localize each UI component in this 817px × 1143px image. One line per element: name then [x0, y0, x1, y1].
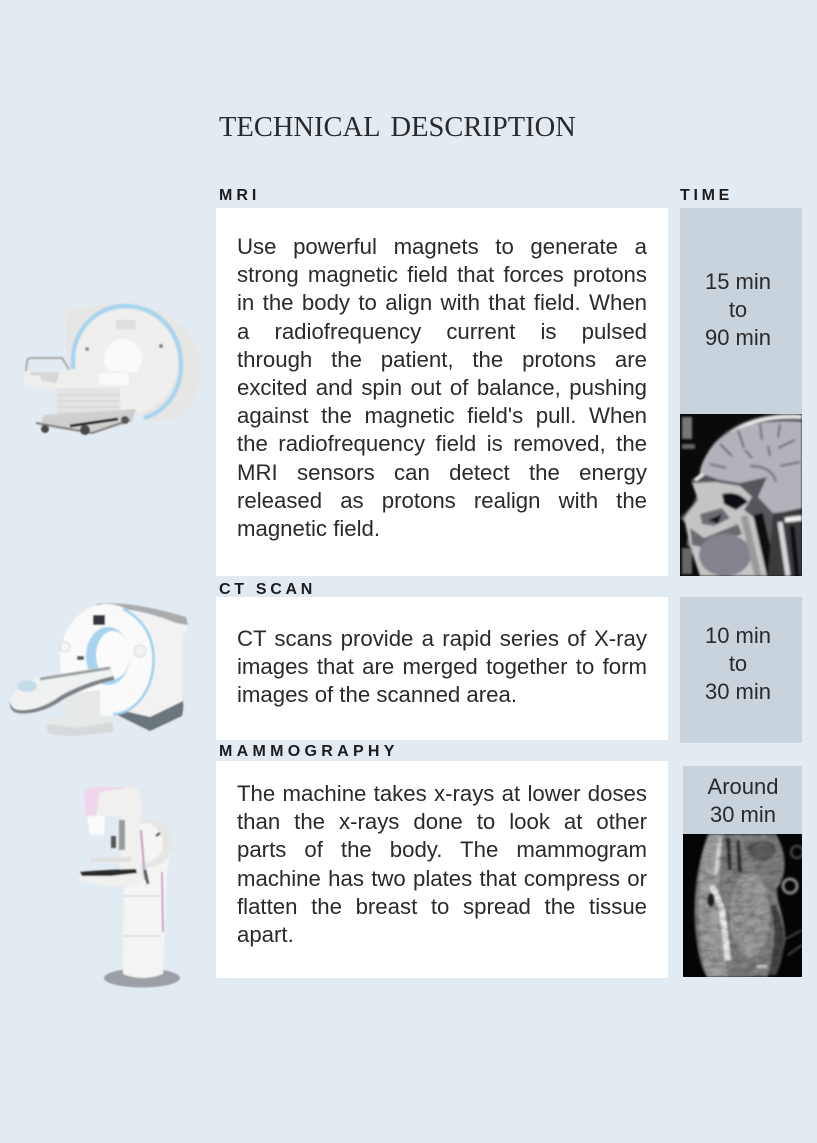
image: sagittal brain MRI	[680, 413, 802, 576]
illustrations layer	[9, 303, 802, 988]
text block: mammography description: machine has two plates that compress or	[237, 866, 647, 891]
text block: CT scan description: images of the scanned area.	[237, 682, 517, 707]
text block: MRI description: against the magnetic field's pull. When	[237, 403, 647, 428]
heading: time: TIME	[680, 187, 733, 204]
text block: MRI description: in the body to align with that field. When	[237, 290, 647, 315]
text: MRI time: 15 min	[705, 269, 771, 294]
text: CT scan time: 10 min	[705, 623, 771, 648]
title: TECHNICAL DESCRIPTION	[219, 112, 576, 143]
panel: mammography time	[683, 766, 802, 834]
panel: CT scan time	[680, 597, 802, 743]
text: MRI time	[705, 269, 771, 350]
panel: CT scan description	[216, 597, 668, 740]
text: MRI time: 90 min	[705, 325, 771, 350]
panel: MRI time	[680, 208, 802, 414]
text block: MRI description: a radiofrequency current is pulsed	[237, 319, 647, 344]
panel: mammography description	[216, 761, 668, 978]
text block: CT scan description: CT scans provide a rapid series of X-ray	[237, 626, 647, 651]
panel: MRI description	[216, 208, 668, 576]
icon: mammography machine	[80, 786, 180, 988]
text: CT scan time: to	[729, 651, 747, 676]
text block: MRI description: through the patient, the protons are	[237, 347, 647, 372]
text: mammography time	[708, 774, 778, 827]
text block: MRI description: Use powerful magnets to generate a	[237, 234, 647, 259]
text block: MRI description: MRI sensors can detect the energy	[237, 460, 647, 485]
text block: MRI description: strong magnetic field that forces protons	[237, 262, 647, 287]
text: mammography time: 30 min	[710, 802, 776, 827]
text block: mammography description: The machine takes x-rays at lower doses	[237, 781, 647, 806]
image: breast scan	[683, 834, 803, 977]
text block: mammography description: flatten the breast to spread the tissue	[237, 894, 647, 919]
text block: CT scan description	[237, 626, 647, 707]
text block: MRI description: the radiofrequency field is removed, the	[237, 431, 647, 456]
text block: MRI description: magnetic field.	[237, 516, 380, 541]
text block: MRI description: excited and spin out of balance, pushing	[237, 375, 647, 400]
icon: MRI machine	[24, 304, 201, 435]
text block: mammography description: than the x-rays done to look at other	[237, 809, 647, 834]
text block: mammography description: apart.	[237, 922, 294, 947]
text block: MRI description	[237, 234, 647, 541]
heading: CT scan: CT SCAN	[219, 581, 316, 598]
text block: mammography description: parts of the body. The mammogram	[237, 837, 647, 862]
text block: CT scan description: images that are merged together to form	[237, 654, 647, 679]
text: CT scan time	[705, 623, 771, 704]
text block: mammography description	[237, 781, 647, 947]
text: CT scan time: 30 min	[705, 679, 771, 704]
heading: mammography: MAMMOGRAPHY	[219, 743, 399, 760]
text block: MRI description: released as protons realign with the	[237, 488, 647, 513]
heading: MRI: MRI	[219, 187, 260, 204]
text: MRI time: to	[729, 297, 747, 322]
text: mammography time: Around	[708, 774, 778, 799]
icon: CT scanner	[10, 603, 188, 736]
